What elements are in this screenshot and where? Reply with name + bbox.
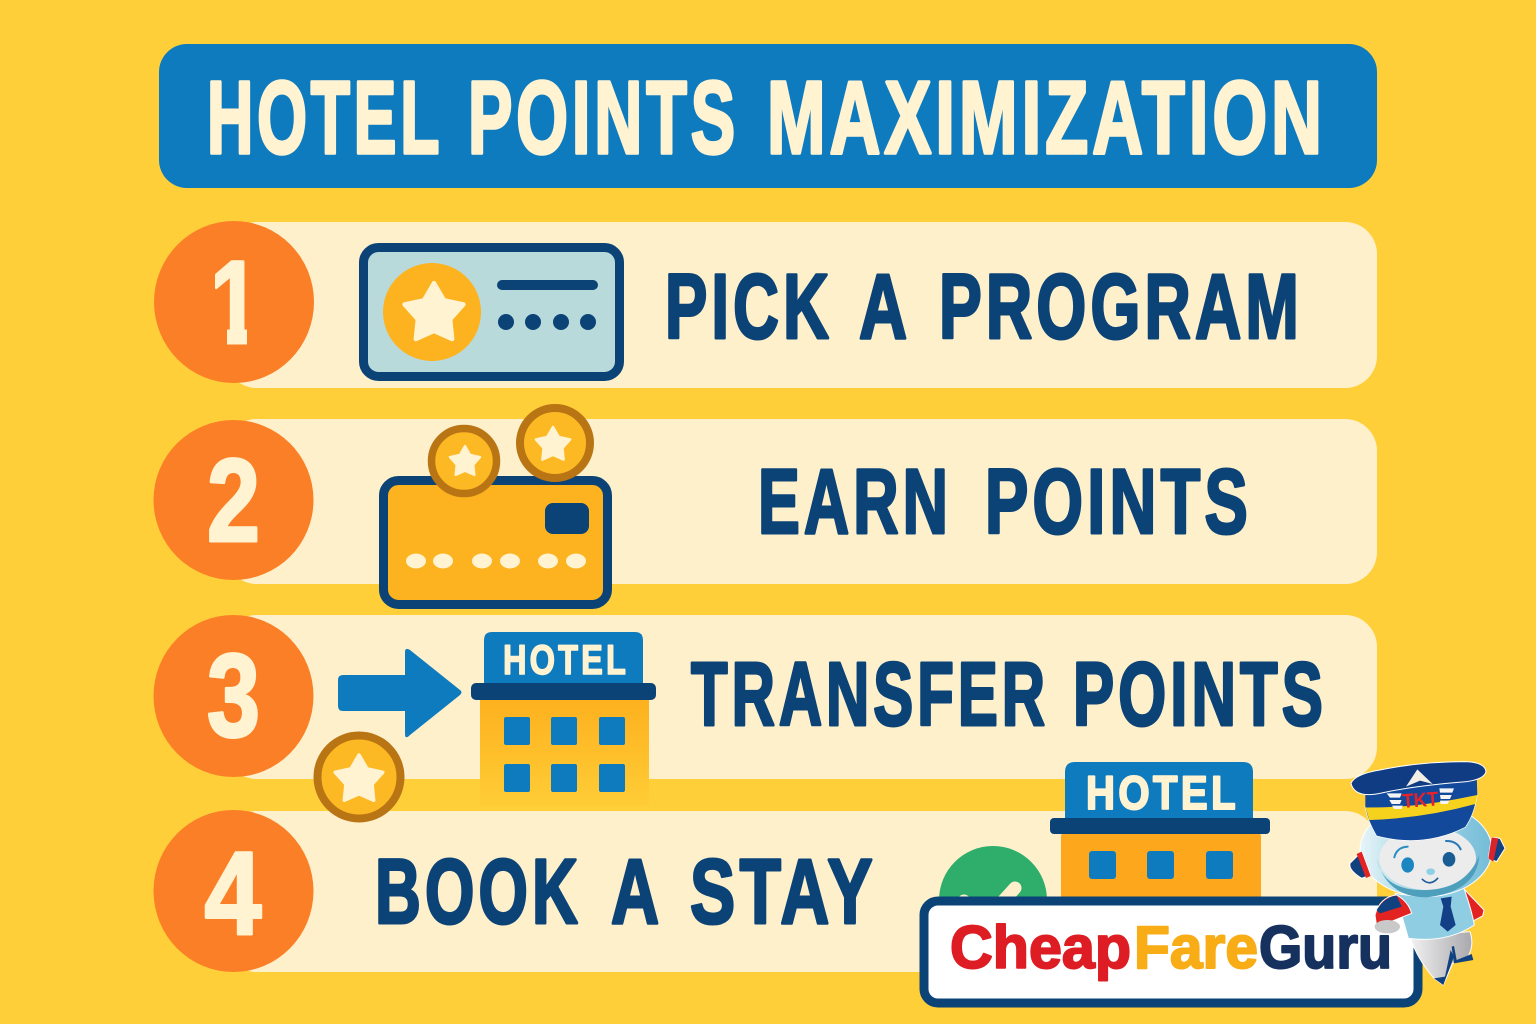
step 1 label: A: [859, 256, 909, 358]
icon: transfer arrow: [338, 649, 462, 737]
step 3 number badge: [154, 615, 314, 777]
step 3 label: POINTS: [1073, 645, 1327, 745]
step 2 number badge: 2: [207, 435, 260, 567]
step 3 label: TRANSFER: [691, 645, 1049, 745]
step 1 panel: pick a program: [154, 221, 1377, 388]
step 2 label: EARN: [758, 451, 952, 553]
icon: green check: [939, 846, 1047, 954]
title banner: [159, 44, 1377, 188]
logo text: Cheap: [950, 914, 1131, 981]
icon: credit card with coins: [384, 408, 608, 604]
mascot tie: [1440, 897, 1456, 932]
step 1 number badge: [154, 221, 314, 383]
step 4 panel: book a stay: [154, 810, 1377, 972]
step 4 number badge: 4: [204, 828, 262, 960]
step 3 panel: transfer points: [154, 615, 1377, 806]
mascot shirt: [1395, 887, 1474, 939]
logo text: Guru: [1259, 914, 1392, 981]
icon: hotel with booking: HOTEL: [1086, 766, 1239, 819]
mascot: pilot character: [1350, 762, 1505, 985]
step 4 label: A: [611, 841, 661, 943]
title text: POINTS: [468, 60, 739, 175]
mascot hat badge text: TKT: [1402, 788, 1439, 813]
step 1 number badge: 1: [210, 237, 260, 369]
step 1 label: PROGRAM: [939, 256, 1303, 358]
mascot left glove: [1375, 895, 1412, 933]
step 3 number badge: 3: [207, 630, 260, 762]
title text: HOTEL: [207, 60, 442, 175]
step 2 number badge: [154, 420, 314, 580]
mascot pilot hat: [1351, 762, 1486, 841]
icon: hotel with booking: [1050, 762, 1270, 908]
step 4 number badge: [154, 810, 314, 972]
logo text: Fare: [1134, 914, 1258, 981]
mascot helmet and face: [1360, 803, 1492, 897]
icon: membership card with star: [364, 248, 620, 376]
step 1 label: PICK: [665, 256, 833, 358]
icon: hotel building: HOTEL: [503, 636, 629, 683]
logo box: CheapFareGuru: [924, 901, 1418, 1003]
icon: hotel building: [471, 632, 656, 806]
step 4 label: STAY: [690, 841, 877, 943]
mascot right arm: [1462, 888, 1484, 922]
step 4 label: BOOK: [375, 841, 582, 943]
icon: coin with star: [318, 736, 400, 818]
mascot ear cups: [1350, 837, 1505, 878]
step 2 panel: earn points: [154, 408, 1377, 604]
step 2 label: POINTS: [985, 451, 1252, 553]
mascot legs: [1410, 932, 1473, 985]
